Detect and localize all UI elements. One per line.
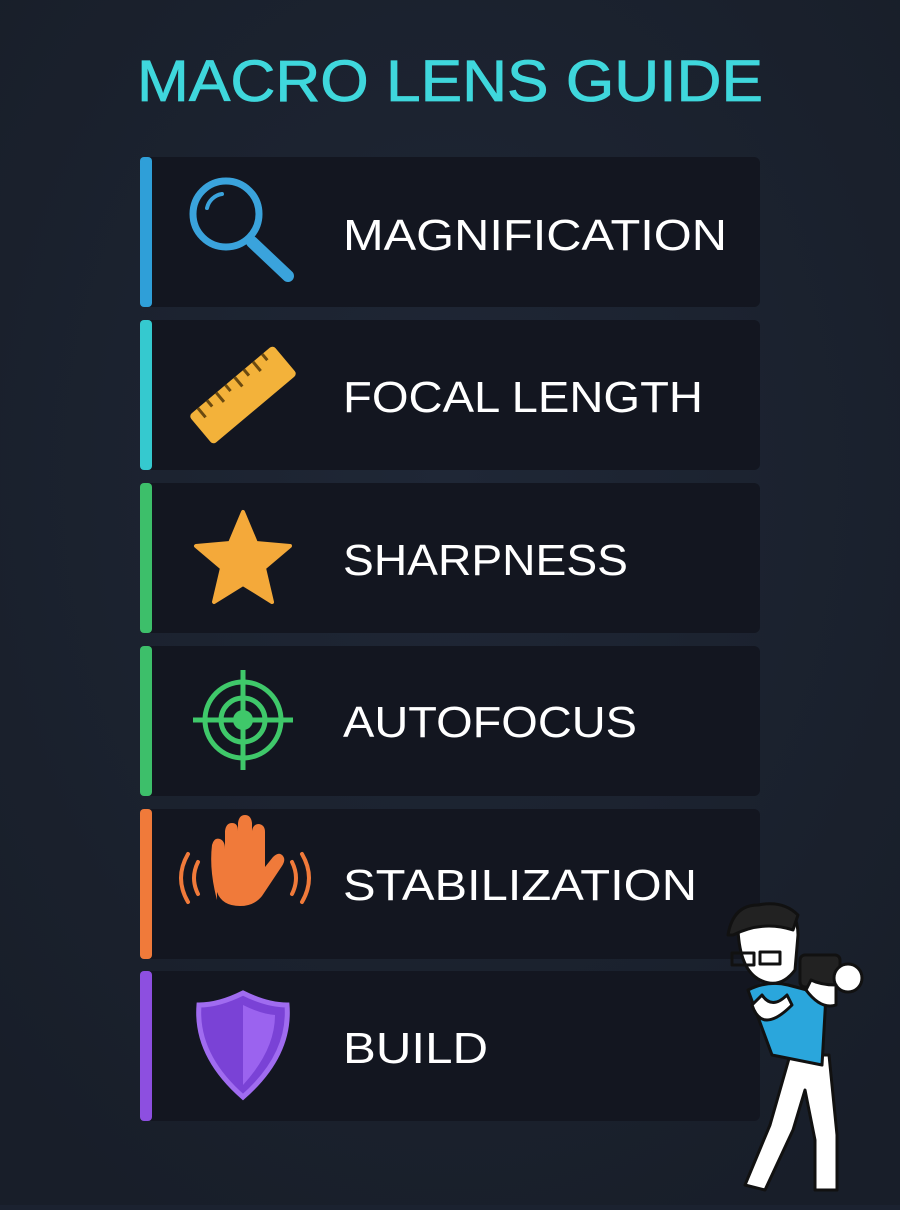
- icon: ruler: [189, 345, 297, 445]
- panel: build: BUILD: [343, 1024, 488, 1073]
- panel: magnification: MAGNIFICATION: [343, 211, 727, 260]
- panel: focal length: FOCAL LENGTH: [343, 373, 703, 422]
- panel: focal length: [140, 320, 760, 470]
- panel: build: [140, 971, 760, 1121]
- panel: sharpness: SHARPNESS: [343, 536, 628, 585]
- icon: star: [196, 512, 290, 602]
- panel: autofocus: AUTOFOCUS: [343, 698, 637, 747]
- panel: sharpness: [140, 483, 760, 633]
- title: MACRO LENS GUIDE: [137, 49, 763, 114]
- panel: autofocus: [140, 646, 760, 796]
- panel: stabilization: STABILIZATION: [343, 861, 697, 910]
- panel: magnification: [140, 157, 760, 307]
- icon: magnifying glass: [193, 181, 288, 276]
- icon: shaking hand: [211, 815, 284, 906]
- icon: target: [193, 670, 293, 770]
- icon: shield: [199, 993, 287, 1097]
- illustration: photographer: [728, 904, 862, 1190]
- panel: stabilization: [140, 809, 760, 959]
